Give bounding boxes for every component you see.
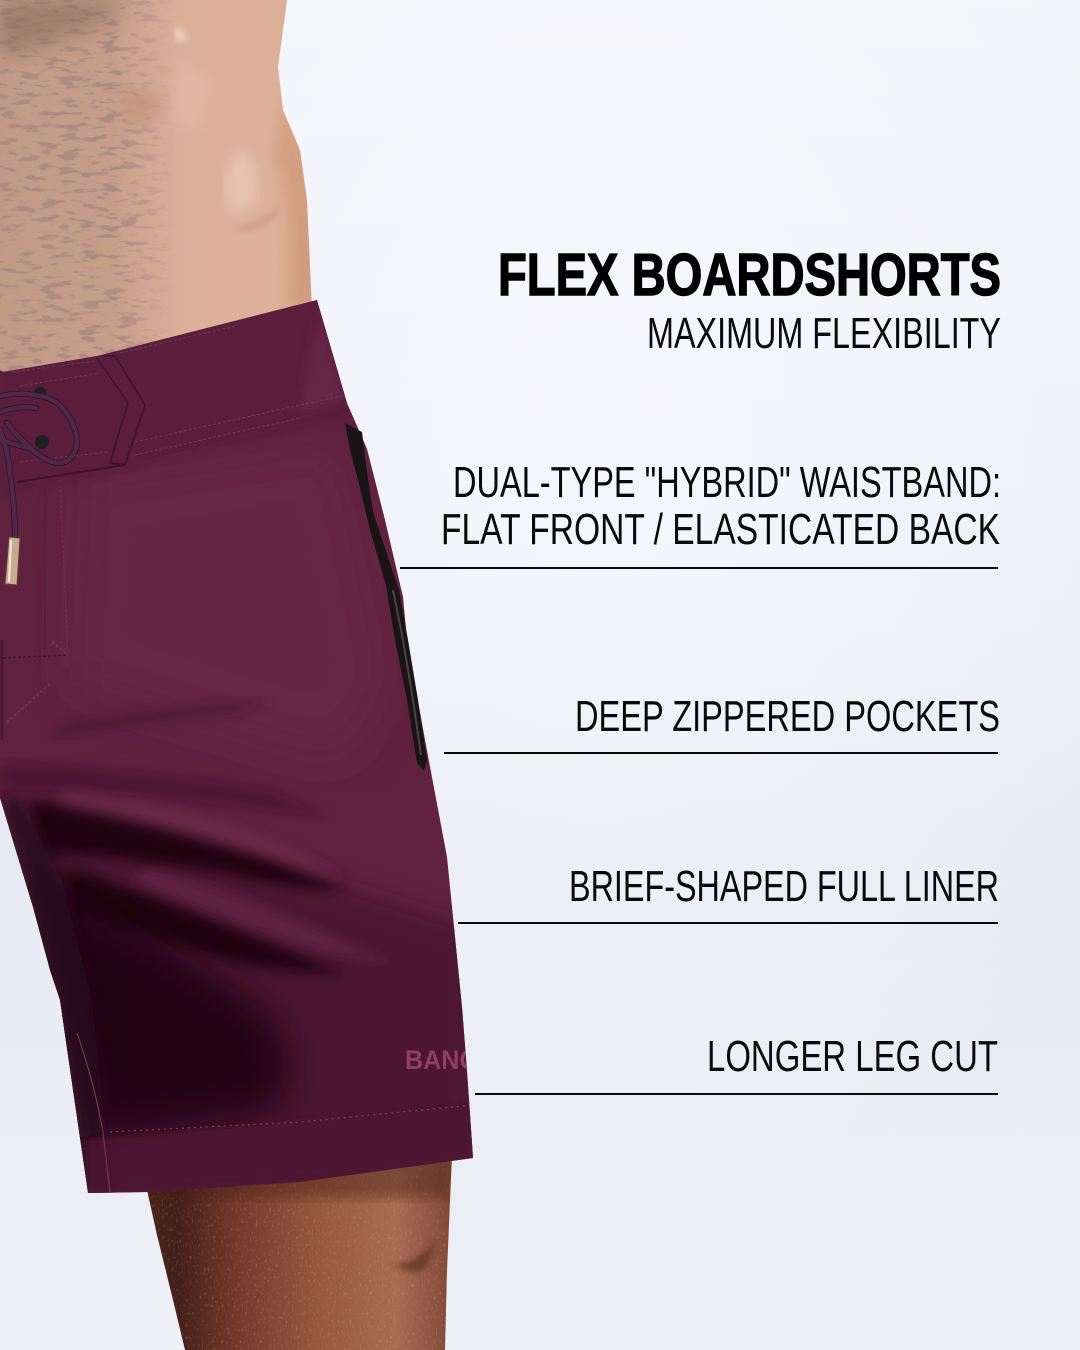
shorts: dark folds xyxy=(0,700,473,1195)
shorts: gold cord tip xyxy=(5,537,20,585)
photo: leg xyxy=(148,1161,452,1350)
photo: boardshorts xyxy=(0,300,473,1193)
shorts: lower shading xyxy=(0,800,480,1195)
shorts: fabric highlights xyxy=(70,440,390,760)
shorts: fly seam xyxy=(2,480,68,740)
shorts: hem xyxy=(77,1033,473,1192)
shorts: BANG logo: BANG xyxy=(405,1045,479,1075)
photo: torso xyxy=(0,0,320,400)
shorts: drawcord xyxy=(0,394,77,537)
shorts: eyelets xyxy=(34,387,49,449)
shorts: zipper xyxy=(345,423,427,771)
feature: hybrid waistband xyxy=(400,458,1001,569)
shorts: waistband xyxy=(0,300,355,500)
